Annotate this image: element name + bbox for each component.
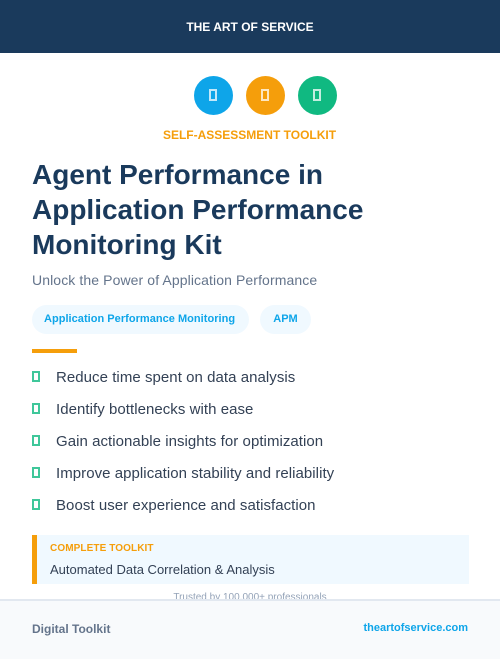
trust note: Trusted by 100,000+ professionals [173,592,327,603]
title: Agent Performance in [32,159,323,190]
header bar [0,0,500,53]
benefit 5: Boost user experience and satisfaction [56,497,316,514]
brand name: THE ART OF SERVICE [186,20,314,34]
icon row [194,76,337,115]
callout: complete toolkit [32,535,469,584]
icon: green circle [298,76,337,115]
callout label: COMPLETE TOOLKIT [50,543,154,554]
tag: APM: APM [273,313,298,325]
benefit 4: Improve application stability and reliability [56,465,334,482]
footer [0,599,500,659]
benefit 2: Identify bottlenecks with ease [56,401,253,418]
footer label: Digital Toolkit [32,622,110,636]
footer url: theartofservice.com [363,622,468,634]
accent bar [32,349,77,353]
tag: APM [260,305,311,334]
tag: Application Performance Monitoring [32,305,249,334]
benefits list [32,369,334,514]
eyebrow label: SELF-ASSESSMENT TOOLKIT [163,128,336,142]
icon: orange circle [246,76,285,115]
tag: Application Performance Monitoring: Application Performance Monitoring [44,313,235,325]
title [32,159,363,260]
title: Monitoring Kit [32,229,222,260]
subtitle: Unlock the Power of Application Performance [32,272,317,288]
benefit 1: Reduce time spent on data analysis [56,369,295,386]
icon: blue circle [194,76,233,115]
benefit 3: Gain actionable insights for optimization [56,433,323,450]
callout text: Automated Data Correlation & Analysis [50,562,275,577]
title: Application Performance [32,194,363,225]
